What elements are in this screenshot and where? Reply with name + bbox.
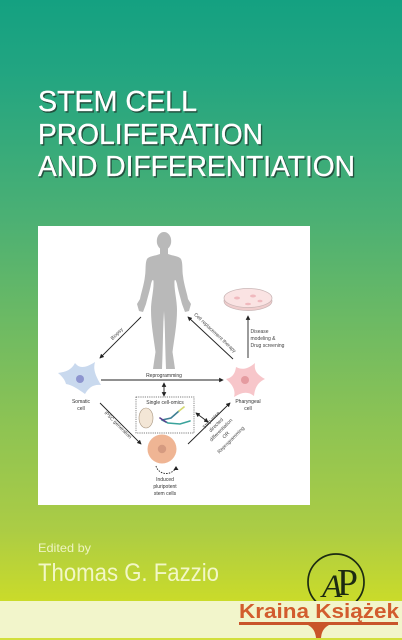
arrow: disease modelling <box>248 316 285 358</box>
editor credit: Edited by <box>38 541 91 555</box>
panel: stem cell diagram <box>38 226 310 505</box>
box: single-cell omics <box>136 397 194 433</box>
icon: publisher logo: A <box>320 569 343 605</box>
arrow: iPSC generation <box>100 403 141 444</box>
icon: pharyngeal cell <box>226 363 265 397</box>
label: induced pluripotent stem cells: Induced <box>156 477 174 483</box>
arrow: biopsy: Biopsy <box>110 326 125 342</box>
arrow: iPSC generation: iPSC generation <box>103 410 133 440</box>
label: induced pluripotent stem cells: pluripotent <box>153 484 177 490</box>
title <box>38 86 356 184</box>
arrow: step-wise directed differentiation: differentiation <box>209 418 234 443</box>
watermark: Kraina Książek: Kraina Książek <box>239 601 400 623</box>
title: PROLIFERATION <box>39 120 264 152</box>
icon: induced pluripotent stem cell <box>148 434 178 474</box>
watermark: Kraina Książek <box>239 601 400 638</box>
arrow: vertical double arrow <box>163 383 165 396</box>
label: pharyngeal cell: Pharyngeal <box>235 399 261 405</box>
arrow: step-wise directed differentiation: Step-wise <box>202 410 222 430</box>
icon: somatic cell <box>58 362 101 394</box>
arrow: step-wise directed differentiation: directed <box>208 417 225 434</box>
icon: publisher logo: P <box>337 562 358 604</box>
label: pharyngeal cell: cell <box>244 406 252 412</box>
title: PROLIFERATION <box>38 119 263 151</box>
icon: publisher logo <box>308 554 364 610</box>
title: STEM CELL <box>39 88 198 120</box>
arrow: step-wise directed differentiation: Reprogramming <box>217 425 246 455</box>
arrow: step-wise directed differentiation: OR <box>222 430 231 440</box>
bottom pale band <box>0 601 402 638</box>
title: AND DIFFERENTIATION <box>38 151 355 183</box>
label: somatic cell: Somatic <box>72 399 91 405</box>
arrow: biopsy <box>100 317 141 358</box>
title: STEM CELL <box>38 86 197 118</box>
icon: petri dish <box>224 288 272 310</box>
arrow: disease modelling: Disease <box>250 329 269 335</box>
editor credit <box>38 541 219 587</box>
box: single-cell omics: Single cell-omics <box>146 400 184 406</box>
arrow: cell replacement therapy: Cell replacement therapy <box>192 312 237 355</box>
arrow: step-wise directed differentiation <box>188 403 246 455</box>
arrow: disease modelling: Drug screening <box>250 343 285 349</box>
icon: trajectory plot <box>160 407 190 424</box>
title: AND DIFFERENTIATION <box>39 152 356 184</box>
arrow: reprogramming: Reprogramming <box>146 373 182 379</box>
editor credit: Thomas G. Fazzio <box>38 559 219 587</box>
arrow: omics double arrow <box>196 413 208 422</box>
arrow: disease modelling: modeling & <box>250 336 276 342</box>
label: induced pluripotent stem cells: stem cells <box>154 491 177 497</box>
arrow: reprogramming <box>101 373 223 380</box>
icon: human figure <box>137 232 191 369</box>
icon: embryo <box>139 408 153 428</box>
label: somatic cell: cell <box>77 406 85 412</box>
